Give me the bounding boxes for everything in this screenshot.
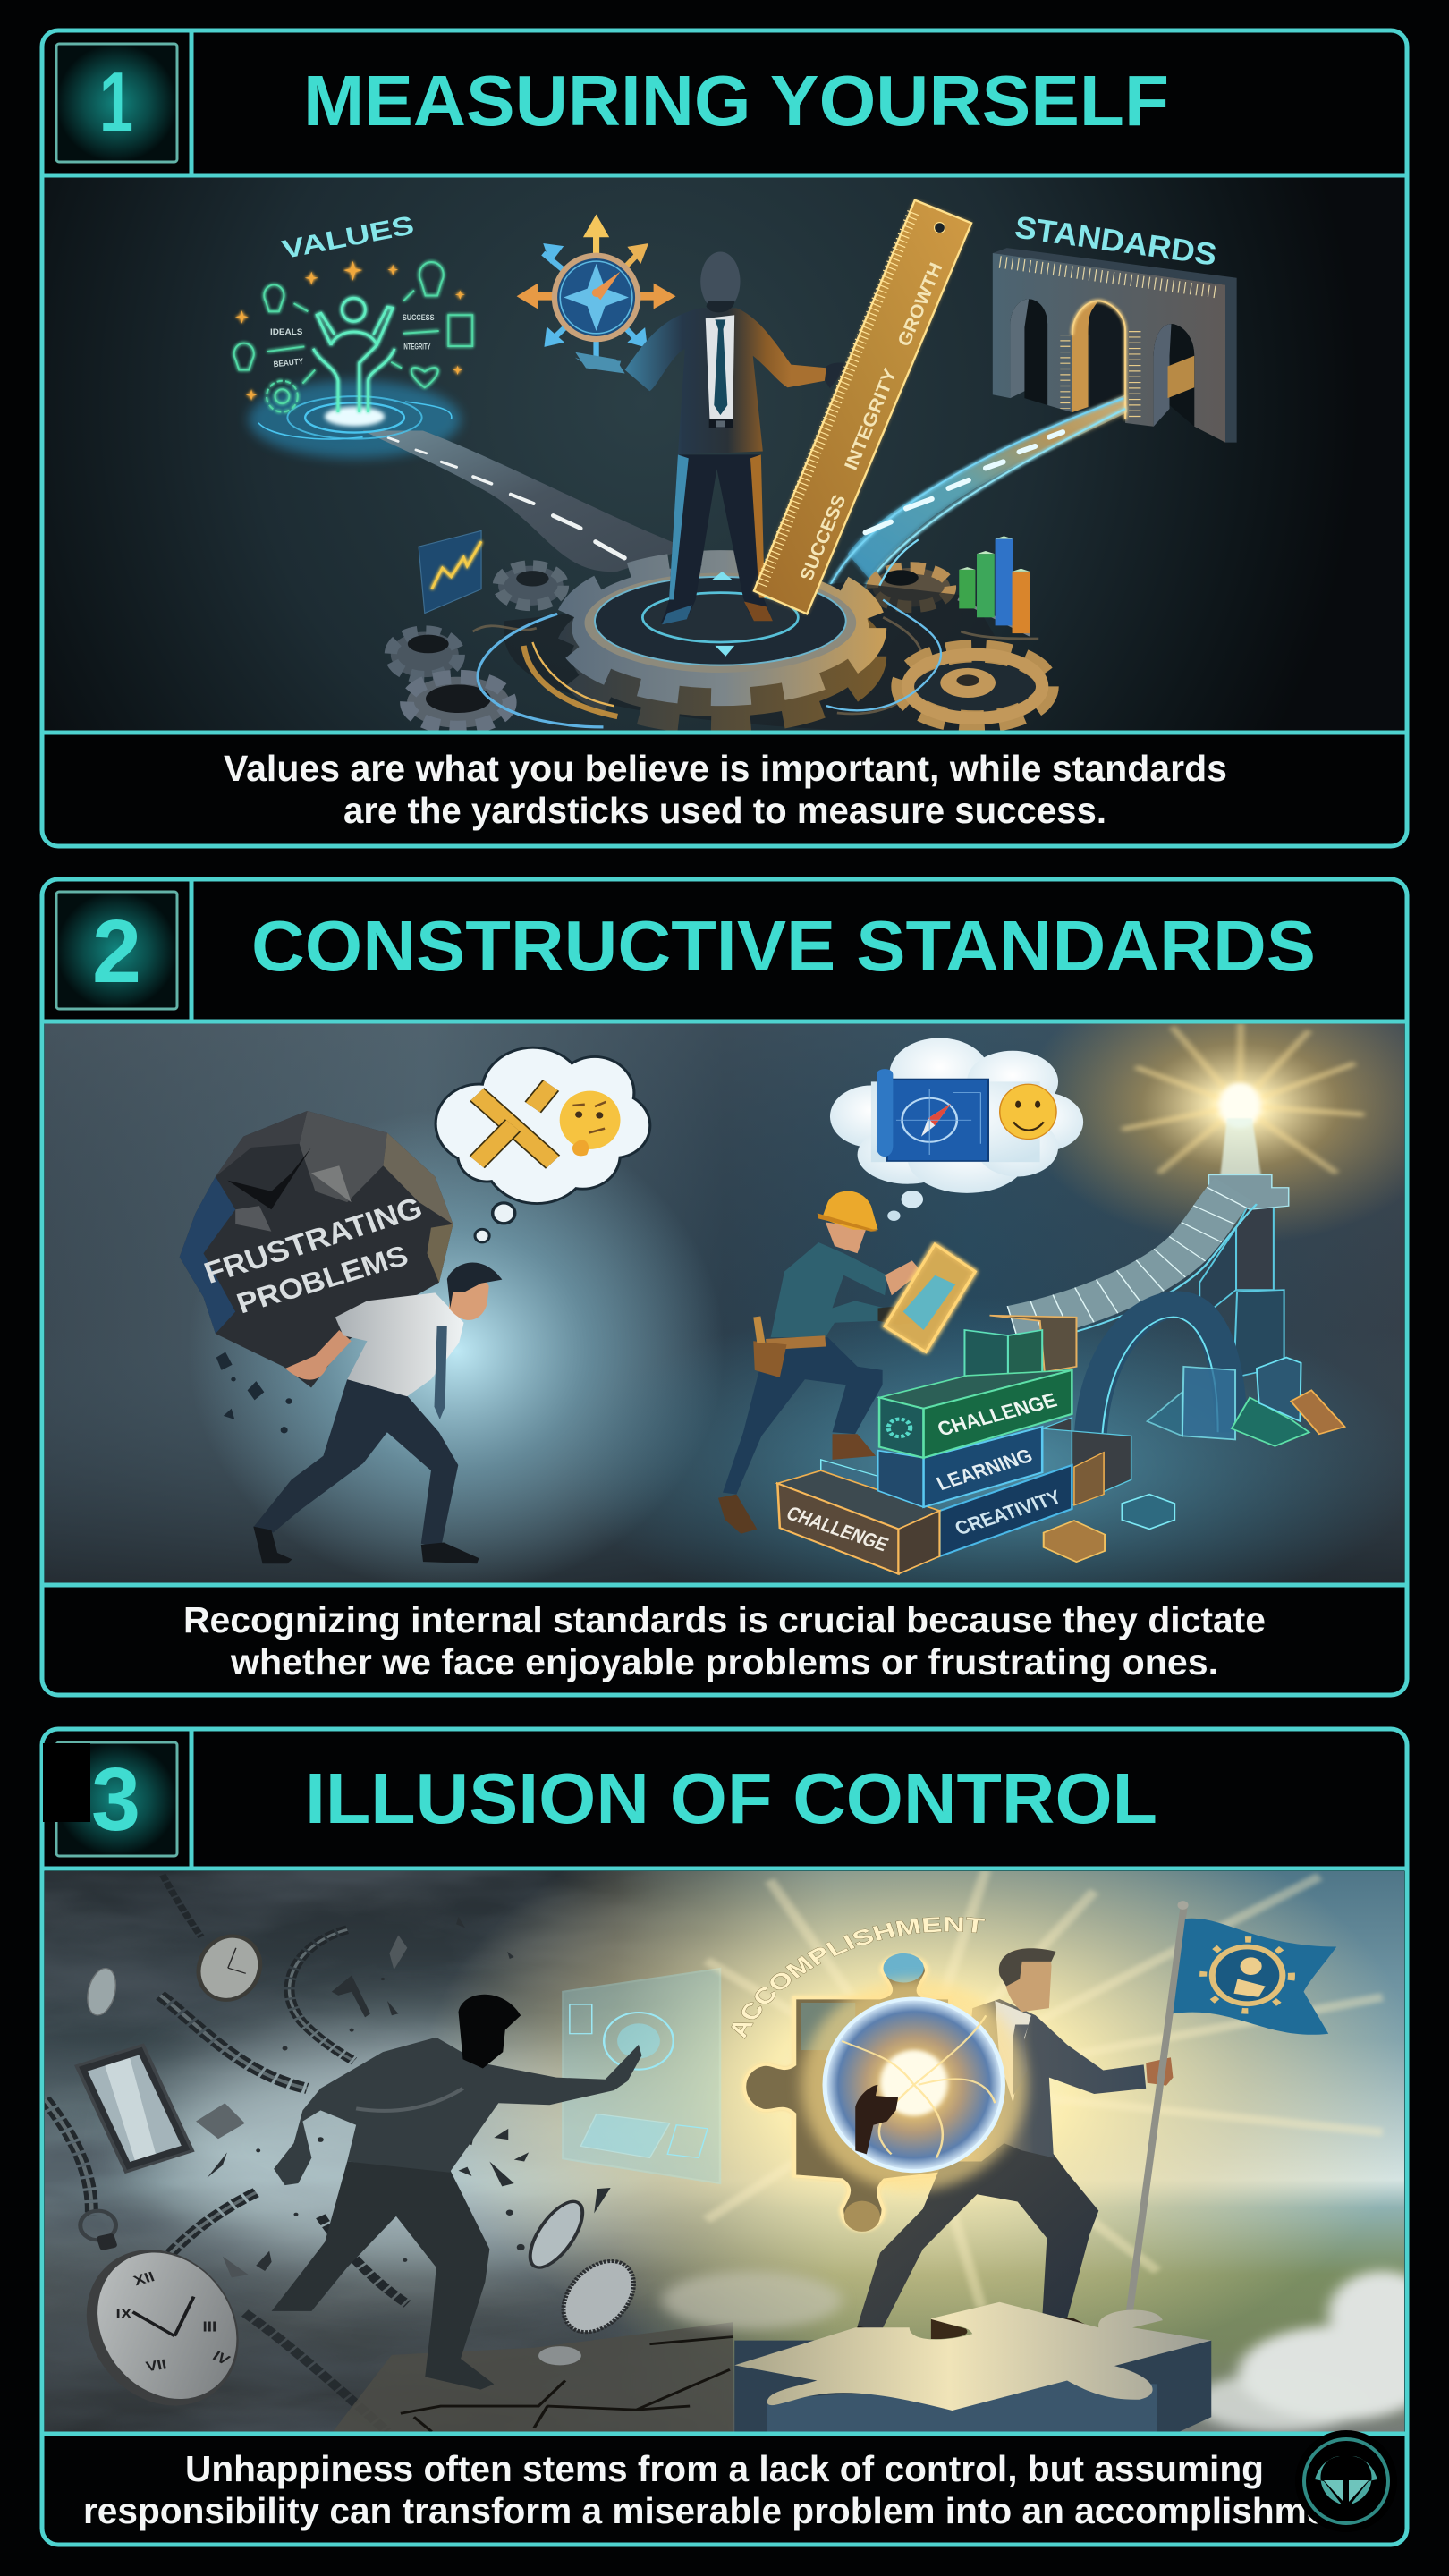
values hologram: [234, 211, 688, 572]
number badge 2: [56, 892, 177, 1009]
illustration: storm and summit: [45, 1871, 1404, 2431]
broken mirror: [77, 2045, 192, 2172]
illustration: boulder and builder: [45, 967, 1449, 1637]
puzzle piece: [744, 1953, 950, 2232]
panel: illusion of control: [39, 1726, 1410, 2547]
block: learning: LEARNING: [933, 1445, 1037, 1495]
watch numerals: III: [203, 2318, 216, 2334]
icon: smiley: [1000, 1084, 1056, 1139]
central gear platform: [572, 568, 869, 716]
clouds: [1193, 2271, 1436, 2432]
glowing held block: [885, 1244, 975, 1352]
debris: [216, 1352, 292, 1433]
neon icons: [234, 262, 472, 412]
businessman: [575, 251, 850, 624]
struggling man: [253, 1262, 502, 1563]
swirls: [478, 539, 941, 727]
building blocks: [777, 1316, 1174, 1574]
icon: blueprint: [877, 1069, 988, 1161]
thought bubble: blueprint: [830, 1038, 1083, 1221]
block: challenge green: CHALLENGE: [935, 1389, 1060, 1441]
panel: constructive standards: [42, 879, 1449, 1695]
small labels: [270, 313, 434, 369]
storm scene: [45, 1875, 733, 2442]
number badge 3: 3: [91, 1750, 140, 1850]
flag and pole: [1126, 1901, 1336, 2341]
neon person: [313, 298, 394, 412]
caption 2: [183, 1599, 1266, 1682]
ruler words: GROWTH: [894, 259, 947, 350]
block: challenge green: [879, 1370, 1072, 1458]
flag emblem: [1203, 1939, 1292, 2011]
silhouette man: [272, 1995, 641, 2390]
distant haze left: [662, 2271, 842, 2329]
rays: [707, 1869, 1383, 2308]
panel: measuring yourself: [42, 30, 1407, 846]
road from values: [363, 431, 688, 572]
watch numerals: IX: [116, 2306, 132, 2322]
small labels: BEAUTY: [273, 357, 304, 369]
heading: illusion of control: ILLUSION OF CONTROL: [305, 1758, 1157, 1838]
panel frame: [42, 879, 1407, 1695]
small labels: SUCCESS: [402, 313, 434, 323]
number badge 2: 2: [92, 902, 141, 1002]
number badge 1: [56, 44, 177, 162]
panel frame: [42, 30, 1407, 846]
ruler words: INTEGRITY: [841, 366, 901, 473]
caption 3: Unhappiness often stems from a lack of control, but assuming: [185, 2448, 1264, 2489]
illustration: values to standards: [45, 177, 1404, 733]
beacon light: [1021, 967, 1449, 1244]
icon: thinking face: [560, 1091, 621, 1156]
standards and ruler scene: [391, 200, 1237, 733]
growth chart card: [419, 530, 481, 614]
cracked ground: [325, 2322, 733, 2442]
label: accomplishment: ACCOMPLISHMENT: [731, 1916, 986, 2039]
number badge 1: 1: [99, 55, 133, 150]
caption 1: are the yardsticks used to measure success.: [343, 790, 1106, 831]
floating clocks: [83, 1931, 648, 2343]
caption 1: Values are what you believe is important, while standards: [224, 748, 1227, 789]
block: learning: [878, 1427, 1042, 1507]
puzzle platform: [734, 2302, 1211, 2442]
caption 2: whether we face enjoyable problems or frustrating ones.: [230, 1641, 1218, 1682]
golden ruler: [754, 200, 971, 614]
heading: measuring yourself: MEASURING YOURSELF: [303, 61, 1169, 140]
caption 1: [224, 748, 1227, 831]
label: frustrating problems: FRUSTRATING: [199, 1191, 427, 1290]
summit scene: [656, 1871, 1404, 2478]
number badge 3: [43, 1742, 177, 1856]
block: challenge base: [777, 1470, 939, 1574]
thought bubble: broken ruler: [437, 1049, 648, 1242]
builder with hard hat: [718, 1191, 921, 1534]
ruler words: [796, 259, 947, 584]
watch numerals: XII: [131, 2268, 157, 2289]
energy orb: [801, 1979, 1027, 2190]
label: frustrating problems: PROBLEMS: [233, 1240, 412, 1320]
boulder man scene: [180, 1049, 648, 1563]
builder scene: [718, 967, 1449, 1574]
panel frame: [42, 1729, 1407, 2545]
bridge and tower: [1013, 1174, 1344, 1451]
watch numerals: [116, 2268, 233, 2375]
glowing road to standards: [830, 394, 1127, 593]
standards arch: [993, 248, 1237, 443]
portal rings: [258, 396, 452, 439]
label: standards: STANDARDS: [1013, 210, 1219, 273]
boulder: [180, 1111, 453, 1387]
block: creativity: CREATIVITY: [952, 1487, 1065, 1539]
hologram screen: [563, 1969, 720, 2183]
block: creativity: [939, 1465, 1072, 1556]
bar chart: [958, 536, 1030, 635]
orange stars: [235, 261, 465, 401]
logo badge: [1295, 2430, 1397, 2532]
watch numerals: VII: [144, 2356, 168, 2375]
ruler words: SUCCESS: [796, 492, 850, 584]
block: challenge base: CHALLENGE: [783, 1503, 892, 1555]
caption 3: responsibility can transform a miserable problem into an accomplishment.: [83, 2490, 1371, 2531]
caption 2: Recognizing internal standards is crucial because they dictate: [183, 1599, 1266, 1640]
small labels: INTEGRITY: [402, 343, 431, 352]
businessman with flag: [851, 1948, 1173, 2367]
shards: [196, 1917, 611, 2277]
big pocket watch: [63, 2211, 262, 2422]
icon: compass: [517, 215, 676, 371]
label: values: VALUES: [280, 211, 417, 265]
watch numerals: IV: [209, 2348, 233, 2368]
caption 3: [83, 2448, 1371, 2531]
chains: [45, 1875, 407, 2432]
gears: [391, 566, 1047, 733]
small labels: IDEALS: [270, 327, 302, 337]
heading: constructive standards: CONSTRUCTIVE STANDARDS: [251, 906, 1316, 986]
